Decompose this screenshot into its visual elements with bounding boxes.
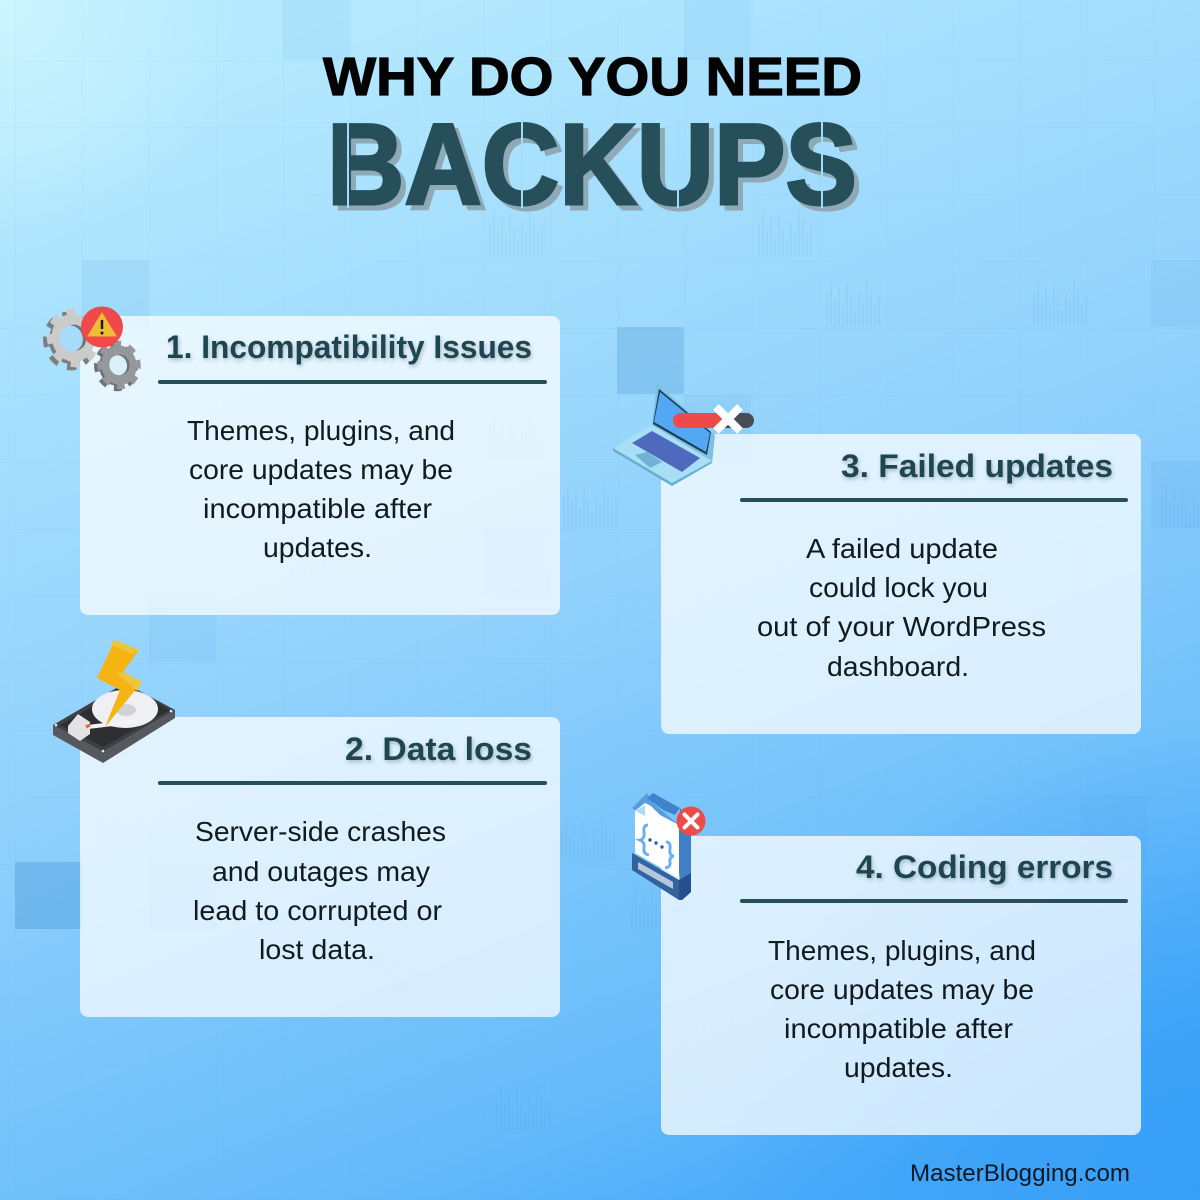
title: why do you need: WHY DO YOU NEED	[323, 47, 862, 107]
icon: hard drive with lightning bolt	[53, 640, 175, 763]
body text 3: could lock you	[809, 572, 988, 603]
body text 1: updates.	[263, 532, 372, 563]
heading 4: 4. Coding errors	[856, 849, 1113, 885]
lightning bolt	[97, 640, 142, 727]
progress bar	[673, 407, 754, 431]
body text 1: incompatible after	[203, 493, 432, 524]
body text 3	[757, 533, 1046, 682]
body text 3: A failed update	[806, 533, 998, 564]
error badge	[676, 806, 706, 836]
body text 2: and outages may	[212, 856, 430, 887]
body text 1: core updates may be	[189, 454, 453, 485]
body text 2: lost data.	[259, 934, 375, 965]
title: backups stencil wordmark: BACKUPS	[332, 106, 862, 234]
divider 2	[158, 781, 547, 785]
panel 2: data loss	[80, 717, 560, 1017]
body text 2: lead to corrupted or	[193, 895, 442, 926]
icon: gears with warning	[42, 306, 141, 391]
divider 1	[158, 380, 547, 384]
icon: laptop with failed progress bar	[613, 384, 754, 486]
heading 3: 3. Failed updates	[841, 448, 1113, 484]
heading 2: 2. Data loss	[345, 731, 532, 767]
icon: code file with error badge	[632, 793, 706, 900]
heading 1: 1. Incompatibility Issues	[166, 329, 532, 365]
body text 4: incompatible after	[784, 1013, 1013, 1044]
body text 3: out of your WordPress	[757, 611, 1046, 642]
panel 1: incompatibility issues	[80, 316, 560, 615]
body text 2	[193, 816, 446, 965]
body text 1	[187, 415, 455, 563]
body text 3: dashboard.	[827, 651, 969, 682]
body text 4: Themes, plugins, and	[768, 935, 1036, 966]
body text 4	[768, 935, 1036, 1083]
divider 4	[740, 899, 1128, 903]
body text 4: updates.	[844, 1052, 953, 1083]
footer: site name: MasterBlogging.com	[910, 1160, 1130, 1187]
panel 4: coding errors	[661, 836, 1141, 1135]
title: backups stencil wordmark: BACKUPS	[327, 101, 857, 229]
divider 3	[740, 498, 1128, 502]
body text 2: Server-side crashes	[195, 816, 446, 847]
warning badge	[81, 306, 123, 348]
panel 3: failed updates	[661, 434, 1141, 734]
body text 4: core updates may be	[770, 974, 1034, 1005]
body text 1: Themes, plugins, and	[187, 415, 455, 446]
